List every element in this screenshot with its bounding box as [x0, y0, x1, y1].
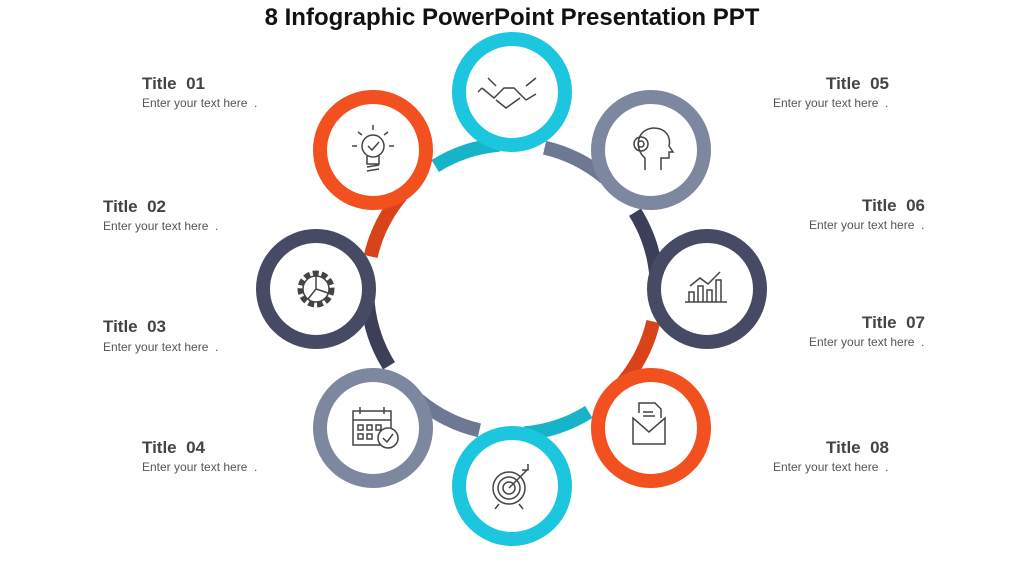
- text: 05: [773, 74, 889, 110]
- text: Enter your text here .: [103, 219, 218, 233]
- text: Title 08: [826, 438, 889, 457]
- text: Title 01: [142, 74, 205, 93]
- text: Title 03: [103, 317, 166, 336]
- text: 01: [142, 74, 257, 110]
- icon: target: [493, 464, 528, 509]
- icon: calendar: [353, 407, 398, 448]
- text: Enter your text here .: [142, 460, 257, 474]
- icon: envelope: [633, 403, 665, 444]
- text: Title 04: [142, 438, 205, 457]
- text: Enter your text here .: [809, 218, 924, 232]
- text: 03: [103, 317, 218, 354]
- text: Title 02: [103, 197, 166, 216]
- icon: lightbulb: [352, 125, 394, 171]
- text: 06: [809, 196, 925, 232]
- title: 8 Infographic PowerPoint Presentation PPT: [265, 4, 759, 31]
- ring: 01 orange: [320, 97, 426, 203]
- text: Enter your text here .: [103, 340, 218, 354]
- ring: gray bottom-left: [320, 375, 426, 481]
- icon: head gear: [634, 128, 673, 170]
- ring: navy right: [654, 236, 760, 342]
- text: Title 07: [862, 313, 925, 332]
- text: 07: [809, 313, 925, 349]
- text: 04: [142, 438, 257, 474]
- text: 08: [773, 438, 889, 474]
- icon: chart: [685, 272, 727, 302]
- text: Enter your text here .: [773, 96, 888, 110]
- text: Title 05: [826, 74, 889, 93]
- icon: gear pie: [300, 273, 332, 305]
- ring: cyan bottom: [459, 433, 565, 539]
- icon: handshake: [478, 78, 536, 108]
- ring: navy left: [263, 236, 369, 342]
- text: Enter your text here .: [773, 460, 888, 474]
- tails: [368, 145, 656, 433]
- text: Enter your text here .: [809, 335, 924, 349]
- ring: 05 gray: [598, 97, 704, 203]
- text: Enter your text here .: [142, 96, 257, 110]
- ring: orange bottom-right: [598, 375, 704, 481]
- text: Title 06: [862, 196, 925, 215]
- ring: top cyan: [459, 39, 565, 145]
- text: 02: [103, 197, 218, 233]
